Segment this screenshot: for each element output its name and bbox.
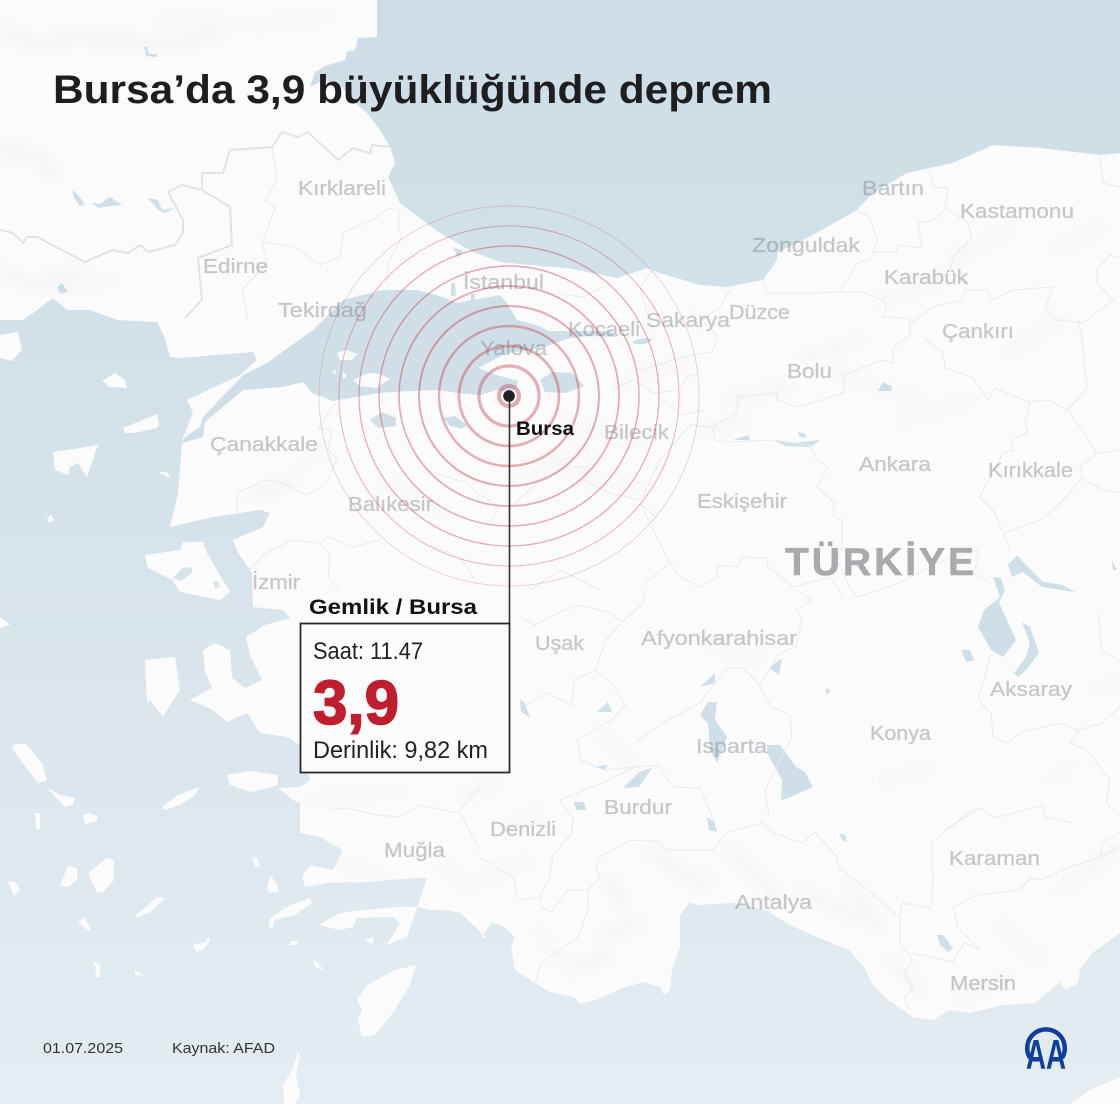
province labels: Antalya (735, 892, 813, 914)
province labels: Kırıkkale (988, 460, 1073, 482)
source: Kaynak: AFAD (172, 1041, 275, 1057)
province labels: Karabük (884, 267, 969, 289)
province labels: İzmir (252, 571, 300, 594)
province labels: Burdur (604, 797, 672, 819)
magnitude: 3,9 (313, 669, 399, 738)
time: Saat: 11.47 (313, 638, 423, 665)
province labels: Afyonkarahisar (641, 628, 797, 650)
province labels: Mersin (950, 973, 1016, 995)
international borders (0, 132, 392, 318)
province labels: Sakarya (646, 310, 731, 332)
callout heading: Gemlik / Bursa (309, 595, 478, 619)
seismic rings (319, 206, 699, 586)
province labels: Aksaray (990, 679, 1072, 701)
province labels: Karaman (949, 848, 1040, 870)
date: 01.07.2025 (43, 1041, 123, 1057)
province labels: Tekirdağ (278, 300, 367, 322)
province labels: Muğla (384, 840, 446, 862)
islands (0, 332, 1120, 1104)
Sea of Marmara and Dardanelles (182, 290, 615, 443)
province labels: İstanbul (463, 271, 544, 294)
province labels: Ankara (859, 454, 932, 476)
province labels: Eskişehir (697, 491, 787, 513)
leader line (508, 396, 510, 624)
callout box (300, 624, 510, 772)
province labels: Düzce (729, 302, 790, 324)
title: Bursa’da 3,9 büyüklüğünde deprem (53, 68, 772, 112)
callout: Gemlik / Bursa (300, 595, 510, 772)
province labels: Edirne (203, 256, 268, 278)
province borders (237, 147, 1120, 1010)
province labels: Çankırı (942, 321, 1014, 343)
province labels: Çanakkale (210, 434, 318, 456)
province labels: Bartın (862, 178, 924, 200)
province labels: Yalova (480, 338, 548, 360)
province labels: Kocaeli (568, 319, 640, 341)
city label: Bursa: Bursa (516, 418, 574, 440)
province labels: Bilecik (604, 422, 670, 444)
province labels: Uşak (535, 633, 585, 655)
province labels: Kırklareli (298, 178, 386, 200)
province labels: Balıkesir (348, 494, 433, 516)
province labels: Isparta (696, 736, 768, 758)
province labels: Kastamonu (960, 201, 1074, 223)
depth: Derinlik: 9,82 km (313, 737, 488, 764)
province labels: Konya (870, 723, 932, 745)
province labels: Zonguldak (752, 235, 861, 257)
province labels (203, 178, 1074, 995)
logo: AA (1026, 1029, 1066, 1078)
country label: TÜRKİYE (785, 541, 974, 584)
province labels: Bolu (787, 361, 832, 383)
logo: AA: AA (1026, 1031, 1066, 1078)
province labels: Denizli (490, 819, 556, 841)
epicenter marker (503, 390, 515, 402)
lakes and rivers (57, 47, 1117, 952)
